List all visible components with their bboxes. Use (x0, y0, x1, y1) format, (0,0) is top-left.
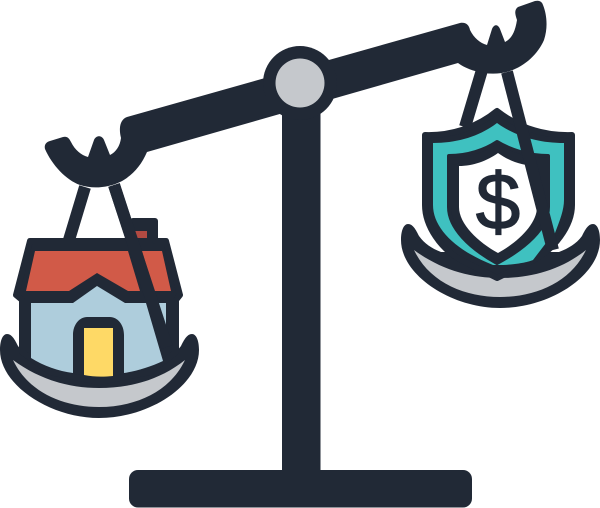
house outline (16, 221, 180, 382)
right pan (401, 224, 600, 308)
right pan with shield (401, 70, 600, 308)
pivot (263, 46, 337, 120)
right rope over house (114, 185, 167, 347)
left pan with house (0, 185, 199, 418)
shield inner (449, 142, 548, 263)
right ropes (465, 70, 553, 250)
door (84, 328, 113, 377)
dollar sign: $ (476, 157, 520, 246)
scale beam (45, 1, 547, 187)
roof (26, 251, 140, 291)
house wall (31, 286, 163, 373)
chimney (135, 231, 147, 238)
icon: shield (425, 111, 572, 278)
left ropes (69, 185, 167, 347)
left pan (0, 334, 199, 418)
scale stand (129, 83, 472, 508)
shield teal band (433, 123, 564, 265)
icon: house (16, 221, 180, 382)
